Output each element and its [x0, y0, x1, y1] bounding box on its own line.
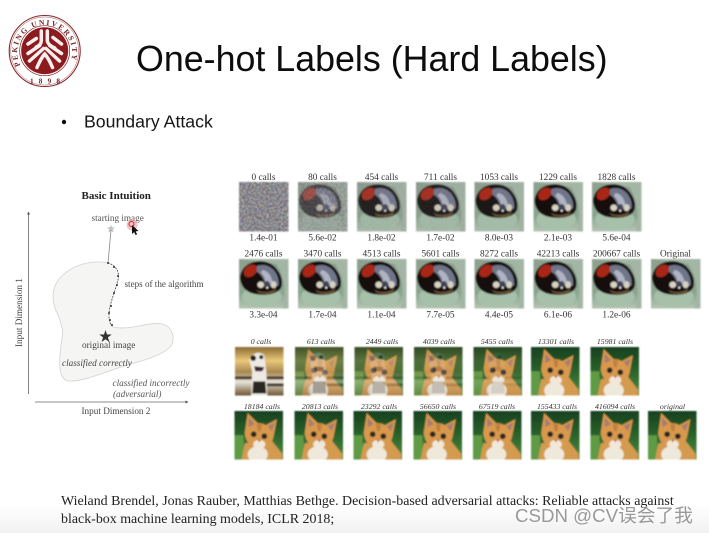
- labels: ladybug rows call counts: 3470 calls: [304, 250, 342, 260]
- labels: ladybug distances: 5.6e-02: [308, 234, 337, 244]
- labels: cat row 2 call counts: 416094 calls: [595, 402, 635, 411]
- labels: ladybug distances: 2.1e-03: [544, 234, 572, 244]
- label: input dimension 2: Input Dimension 2: [82, 406, 151, 416]
- labels: cat row 2 call counts: 20813 calls: [302, 402, 338, 411]
- icon: starting star: [107, 224, 115, 232]
- labels: ladybug rows call counts: 80 calls: [308, 173, 337, 183]
- icon: original star: [99, 330, 112, 342]
- labels: ladybug distances: [249, 234, 631, 320]
- labels: cat row 1 call counts: 613 calls: [307, 337, 335, 346]
- labels: cat row 2 call counts: 23292 calls: [361, 402, 397, 411]
- chart: decision region blob: [53, 262, 173, 381]
- labels: ladybug rows call counts: 4513 calls: [363, 250, 401, 260]
- labels: cat row 1 call counts: 4039 calls: [423, 337, 455, 346]
- arrow: first step line: [108, 230, 111, 263]
- labels: ladybug distances: 3.3e-04: [249, 310, 278, 320]
- labels: ladybug distances: 5.6e-04: [602, 234, 631, 244]
- labels: ladybug rows call counts: 711 calls: [424, 173, 457, 183]
- images: cat row 1: [235, 347, 639, 399]
- labels: ladybug rows call counts: 5601 calls: [422, 250, 460, 260]
- labels: ladybug distances: 1.7e-04: [308, 310, 337, 320]
- labels: ladybug rows call counts: [245, 173, 691, 260]
- labels: ladybug rows call counts: Original: [660, 250, 691, 260]
- labels: ladybug distances: 8.0e-03: [485, 234, 513, 244]
- labels: ladybug distances: 6.1e-06: [544, 310, 572, 320]
- labels: cat row 2 call counts: 18184 calls: [244, 402, 280, 411]
- panel: basic intuition diagram: [14, 190, 204, 416]
- title: One-hot Labels (Hard Labels): [136, 39, 608, 79]
- labels: ladybug distances: 1.4e-01: [249, 234, 278, 244]
- bullet: Boundary Attack: Boundary Attack: [84, 112, 213, 132]
- labels: cat row 1 call counts: 13301 calls: [538, 337, 574, 346]
- citation text: Wieland Brendel, Jonas Rauber, Matthias Bethge. Decision-based adversarial attacks: Reliable attacks against: [61, 494, 674, 509]
- labels: ladybug rows call counts: 454 calls: [365, 173, 399, 183]
- icon: mouse cursor highlight: [126, 220, 138, 235]
- labels: cat row 1 call counts: 15981 calls: [597, 337, 633, 346]
- labels: ladybug rows call counts: 1053 calls: [480, 173, 518, 183]
- path: algorithm steps: [107, 262, 119, 326]
- labels: ladybug rows call counts: 1828 calls: [598, 173, 636, 183]
- labels: ladybug rows call counts: 200667 calls: [593, 250, 641, 260]
- label: input dimension 1: Input Dimension 1: [14, 278, 24, 347]
- axis: input dimension 1: [27, 212, 30, 394]
- panel: cat image grid: [234, 337, 696, 463]
- citation text: black-box machine learning models, ICLR 2018;: [61, 512, 334, 527]
- images: cat row 2: [234, 411, 696, 463]
- labels: cat row 2 call counts: 67519 calls: [479, 402, 515, 411]
- panel: ladybug image grid: [239, 173, 700, 320]
- labels: cat row 2 call counts: original: [660, 402, 685, 411]
- heading: Basic Intuition: Basic Intuition: [82, 190, 151, 202]
- labels: ladybug rows call counts: 2476 calls: [245, 250, 283, 260]
- labels: ladybug rows call counts: 42213 calls: [537, 250, 580, 260]
- watermark: CSDN: CSDN @CV误会了我: [515, 505, 693, 526]
- labels: ladybug distances: 1.2e-06: [602, 310, 631, 320]
- axis: input dimension 2: [35, 400, 188, 404]
- labels: ladybug rows call counts: 1229 calls: [539, 173, 577, 183]
- label: classified incorrectly: classified incorrectly: [112, 378, 190, 388]
- labels: ladybug distances: 4.4e-05: [485, 310, 513, 320]
- label: original image: original image: [82, 340, 135, 350]
- labels: cat row 1 call counts: 5455 calls: [481, 337, 513, 346]
- images: ladybug row 1: [239, 182, 642, 232]
- label: classified correctly: classified correctly: [62, 358, 133, 368]
- labels: cat row 1 call counts: 2449 calls: [366, 337, 398, 346]
- labels: cat row 2 call counts: [244, 402, 685, 411]
- images: ladybug row 2: [239, 259, 700, 308]
- icon: Peking University logo: [8, 15, 81, 87]
- label: starting image: starting image: [92, 213, 144, 223]
- labels: cat row 1 call counts: [251, 337, 633, 346]
- labels: cat row 1 call counts: 0 calls: [251, 337, 271, 346]
- icon: Peking University logo: 1 8 9 8: [30, 78, 60, 86]
- labels: ladybug distances: 1.8e-02: [367, 234, 396, 244]
- labels: cat row 2 call counts: 155433 calls: [537, 402, 577, 411]
- labels: ladybug rows call counts: 8272 calls: [480, 250, 518, 260]
- labels: ladybug distances: 7.7e-05: [426, 310, 455, 320]
- icon: Peking University logo: PEKING UNIVERSITY: [12, 20, 78, 68]
- label: steps of the algorithm: steps of the algorithm: [124, 279, 204, 289]
- labels: ladybug rows call counts: 0 calls: [251, 173, 276, 183]
- label: classified incorrectly: (adversarial): [113, 389, 161, 399]
- labels: ladybug distances: 1.1e-04: [367, 310, 396, 320]
- labels: ladybug distances: 1.7e-02: [426, 234, 455, 244]
- labels: cat row 2 call counts: 56650 calls: [420, 402, 456, 411]
